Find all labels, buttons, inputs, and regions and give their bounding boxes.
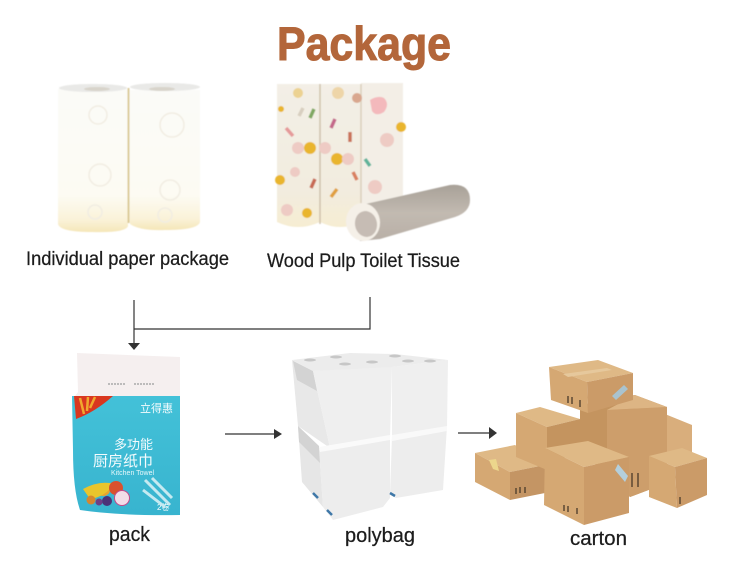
pack text: 立得惠 xyxy=(140,401,173,415)
label: polybag: polybag xyxy=(345,525,415,547)
pack text: Kitchen Towel xyxy=(111,470,155,477)
title: Package xyxy=(277,17,451,70)
arrow: merge into pack xyxy=(128,297,370,350)
large back carton xyxy=(580,395,667,497)
label: carton: carton xyxy=(570,528,627,550)
label: individual paper package: Individual paper package xyxy=(26,249,229,270)
label: wood pulp toilet tissue: Wood Pulp Toilet Tissue xyxy=(267,251,460,272)
image: polybag stack xyxy=(292,353,448,520)
handling marks xyxy=(516,396,680,514)
image: patterned rolls with lying roll xyxy=(275,83,470,244)
small right carton xyxy=(649,448,707,508)
image: two white paper rolls xyxy=(58,83,200,232)
left low carton xyxy=(475,445,545,500)
image: stack of cartons xyxy=(475,360,707,525)
top carton xyxy=(549,360,633,413)
pack text: 多功能 xyxy=(114,437,153,452)
arrow: pack to polybag xyxy=(225,429,282,439)
arrow: polybag to carton xyxy=(458,427,497,439)
front carton xyxy=(544,441,629,525)
fruit xyxy=(83,481,130,506)
label: pack: pack xyxy=(109,524,151,546)
back right carton xyxy=(660,412,692,462)
image: kitchen towel pack xyxy=(72,353,180,515)
pack text: 2卷 xyxy=(157,502,169,512)
pack text: 厨房纸巾 xyxy=(93,453,153,470)
pack text xyxy=(93,401,173,512)
left middle carton xyxy=(516,407,580,470)
